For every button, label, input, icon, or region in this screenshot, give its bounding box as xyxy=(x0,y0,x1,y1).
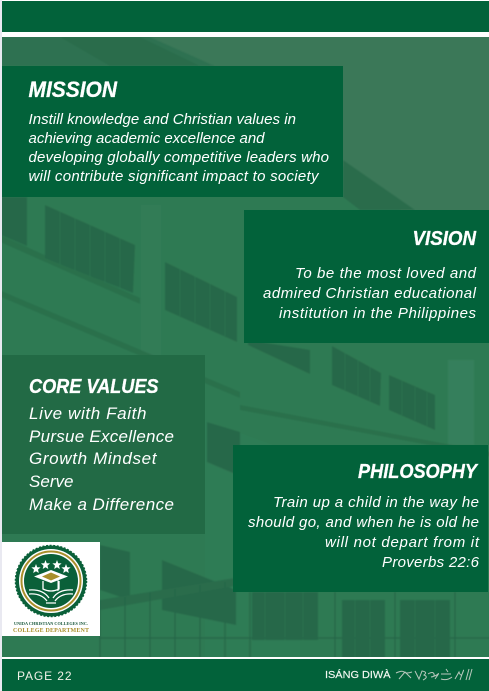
heading: vision: VISION xyxy=(412,228,477,250)
seal xyxy=(16,546,86,616)
panel: vision xyxy=(244,210,489,343)
mission text xyxy=(28,111,329,185)
core values list: Serve xyxy=(29,472,74,491)
footer band xyxy=(2,659,489,691)
vision text: institution in the Philippines xyxy=(279,305,476,322)
philosophy text: Train up a child in the way he xyxy=(273,494,479,511)
panel: philosophy xyxy=(233,445,488,592)
pillars and ledges xyxy=(141,205,161,425)
mission text: Instill knowledge and Christian values in xyxy=(28,111,296,128)
vision text: To be the most loved and xyxy=(295,265,477,282)
philosophy text: will not depart from it xyxy=(325,534,480,551)
windows xyxy=(0,197,450,680)
walls xyxy=(0,197,489,680)
core values list: Growth Mindset xyxy=(29,449,158,468)
philosophy text: Proverbs 22:6 xyxy=(382,554,480,571)
logo caption: COLLEGE DEPARTMENT xyxy=(13,628,89,634)
icon: baybayin script ornament xyxy=(396,669,472,680)
logo caption xyxy=(13,621,89,634)
philosophy text xyxy=(248,494,480,571)
publication name: ISÁNG DIWÀ xyxy=(325,668,390,681)
core values list: Make a Difference xyxy=(29,495,174,514)
philosophy text: should go, and when he is old he xyxy=(248,514,479,531)
core values list: Pursue Excellence xyxy=(29,427,174,446)
core values list xyxy=(29,404,174,514)
mission text: achieving academic excellence and xyxy=(28,130,265,147)
header band xyxy=(2,1,489,32)
panel: mission xyxy=(2,66,343,197)
panel: core values xyxy=(2,355,205,534)
stars xyxy=(31,560,71,573)
window grids xyxy=(60,212,435,680)
heading: mission: MISSION xyxy=(28,77,118,102)
logo: college department seal xyxy=(2,542,100,636)
vision text xyxy=(263,265,477,322)
railing xyxy=(100,578,235,610)
sky xyxy=(151,37,489,210)
mission text: will contribute significant impact to society xyxy=(28,168,320,185)
graduation cap xyxy=(34,570,68,591)
core values list: Live with Faith xyxy=(29,404,146,423)
page number: PAGE 22 xyxy=(17,669,72,683)
heading: core values: CORE VALUES xyxy=(29,376,159,398)
mission text: developing globally competitive leaders who xyxy=(28,149,329,166)
logo caption: UNIDA CHRISTIAN COLLEGES INC. xyxy=(14,621,88,626)
vision text: admired Christian educational xyxy=(263,285,477,302)
heading: philosophy: PHILOSOPHY xyxy=(358,461,478,483)
open book xyxy=(29,590,73,603)
